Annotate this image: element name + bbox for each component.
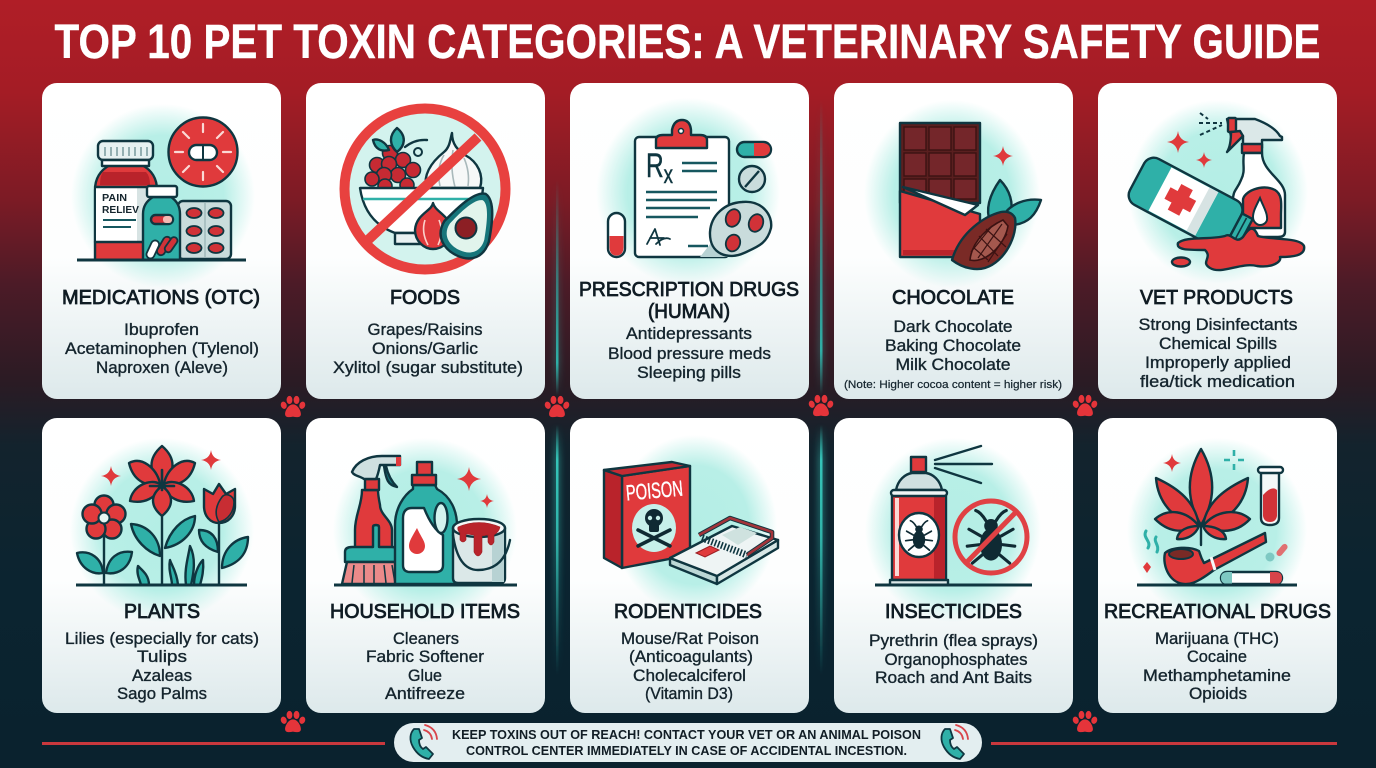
text block: Opioids xyxy=(1189,685,1247,703)
text block xyxy=(1143,630,1291,703)
text block xyxy=(621,630,759,703)
text block: Cocaine xyxy=(1187,648,1247,666)
decorative teal dividers xyxy=(555,100,823,675)
panel: insecticides xyxy=(834,418,1073,713)
callout: safety warning xyxy=(394,723,982,762)
text block: Ibuprofen xyxy=(124,321,199,339)
callout text xyxy=(452,727,921,758)
text block: Cleaners xyxy=(393,630,459,648)
heading second line: (HUMAN) xyxy=(648,301,730,323)
text block: Methamphetamine xyxy=(1143,667,1291,685)
text block: Chemical Spills xyxy=(1159,335,1277,353)
text block: Baking Chocolate xyxy=(885,337,1021,355)
icon: paw prints xyxy=(280,395,1098,732)
text block: Naproxen (Aleve) xyxy=(96,359,228,377)
callout text: KEEP TOXINS OUT OF REACH! CONTACT YOUR VET OR AN ANIMAL POISON xyxy=(452,727,921,742)
icon: prescription clipboard: R xyxy=(646,147,664,185)
text block: Organophosphates xyxy=(884,651,1028,669)
text block: Dark Chocolate xyxy=(894,318,1012,336)
heading: VET PRODUCTS xyxy=(1140,287,1293,309)
heading: CHOCOLATE xyxy=(892,287,1014,309)
panel: plants xyxy=(42,418,281,713)
text block xyxy=(333,321,523,377)
text block: Mouse/Rat Poison xyxy=(621,630,759,648)
heading: RECREATIONAL DRUGS xyxy=(1104,601,1331,623)
icon: poison box and mouse trap: POISON xyxy=(625,476,684,505)
text block: Sleeping pills xyxy=(637,364,741,382)
heading: PRESCRIPTION DRUGS xyxy=(579,279,799,301)
text block xyxy=(844,318,1062,391)
icon: cleaning supplies xyxy=(333,438,517,622)
text block: flea/tick medication xyxy=(1140,373,1295,391)
panel: prescription drugs xyxy=(570,83,809,399)
text block xyxy=(65,630,259,703)
text block xyxy=(869,632,1038,687)
text block: Lilies (especially for cats) xyxy=(65,630,259,648)
heading: RODENTICIDES xyxy=(614,601,762,623)
heading: HOUSEHOLD ITEMS xyxy=(330,601,520,623)
text block xyxy=(65,321,259,377)
callout text: CONTROL CENTER IMMEDIATELY IN CASE OF ACCIDENTAL INCESTION. xyxy=(466,743,907,758)
text block: Onions/Garlic xyxy=(372,340,478,358)
icon: disinfectant bottle and spill xyxy=(1125,100,1308,284)
text block: Blood pressure meds xyxy=(608,345,771,363)
text block: Xylitol (sugar substitute) xyxy=(333,359,523,377)
panel: vet products xyxy=(1098,83,1337,399)
text block: Roach and Ant Baits xyxy=(875,669,1032,687)
text block: Antidepressants xyxy=(626,325,752,343)
text block: (Vitamin D3) xyxy=(645,685,733,703)
heading: PLANTS xyxy=(124,601,200,623)
text block: Milk Chocolate xyxy=(896,356,1010,374)
heading: INSECTICIDES xyxy=(885,601,1022,623)
panel: foods xyxy=(306,83,545,399)
icon: phone right xyxy=(941,725,968,759)
icon: poison box and mouse trap xyxy=(604,435,778,615)
text block: Antifreeze xyxy=(385,685,465,703)
icon: toxic flowers xyxy=(70,438,254,622)
text block xyxy=(366,630,485,703)
text block xyxy=(608,325,771,382)
text block: Glue xyxy=(408,667,442,685)
icon: pill bottles and blister pack: PAIN xyxy=(102,193,127,204)
text block: Cholecalciferol xyxy=(633,667,746,685)
panel: rodenticides xyxy=(570,418,809,713)
panel: medications (OTC) xyxy=(42,83,281,399)
icon: pill bottles and blister pack: RELIEV xyxy=(102,205,139,216)
text block: Marijuana (THC) xyxy=(1155,630,1279,648)
icon: forbidden foods xyxy=(344,108,507,270)
text block xyxy=(1138,316,1298,391)
panel: household items xyxy=(306,418,545,713)
text block: Sago Palms xyxy=(117,685,207,703)
panel: chocolate xyxy=(834,83,1073,399)
icon: prescription clipboard xyxy=(596,98,780,286)
text block: Fabric Softener xyxy=(366,648,485,666)
text block: Pyrethrin (flea sprays) xyxy=(869,632,1038,650)
panel: recreational drugs xyxy=(1098,418,1337,713)
footer rules xyxy=(42,742,1337,745)
text block: Improperly applied xyxy=(1145,354,1291,372)
icon: bug spray xyxy=(865,438,1041,622)
icon: phone left xyxy=(410,725,437,759)
heading: FOODS xyxy=(390,287,460,309)
text block: Acetaminophen (Tylenol) xyxy=(65,340,259,358)
text block: Azaleas xyxy=(132,667,192,685)
icon: pill bottles and blister pack xyxy=(71,104,255,288)
text block: (Anticoagulants) xyxy=(629,648,753,666)
heading: MEDICATIONS (OTC) xyxy=(62,287,260,309)
icon: chocolate bar and cacao pod xyxy=(864,100,1041,288)
icon: cannabis leaf and pipe xyxy=(1127,438,1307,622)
text block: (Note: Higher cocoa content = higher risk) xyxy=(844,379,1062,391)
text block: Grapes/Raisins xyxy=(368,321,482,339)
text block: Tulips xyxy=(137,648,187,666)
text block: Strong Disinfectants xyxy=(1138,316,1298,334)
icon: prescription clipboard: x xyxy=(664,159,674,189)
